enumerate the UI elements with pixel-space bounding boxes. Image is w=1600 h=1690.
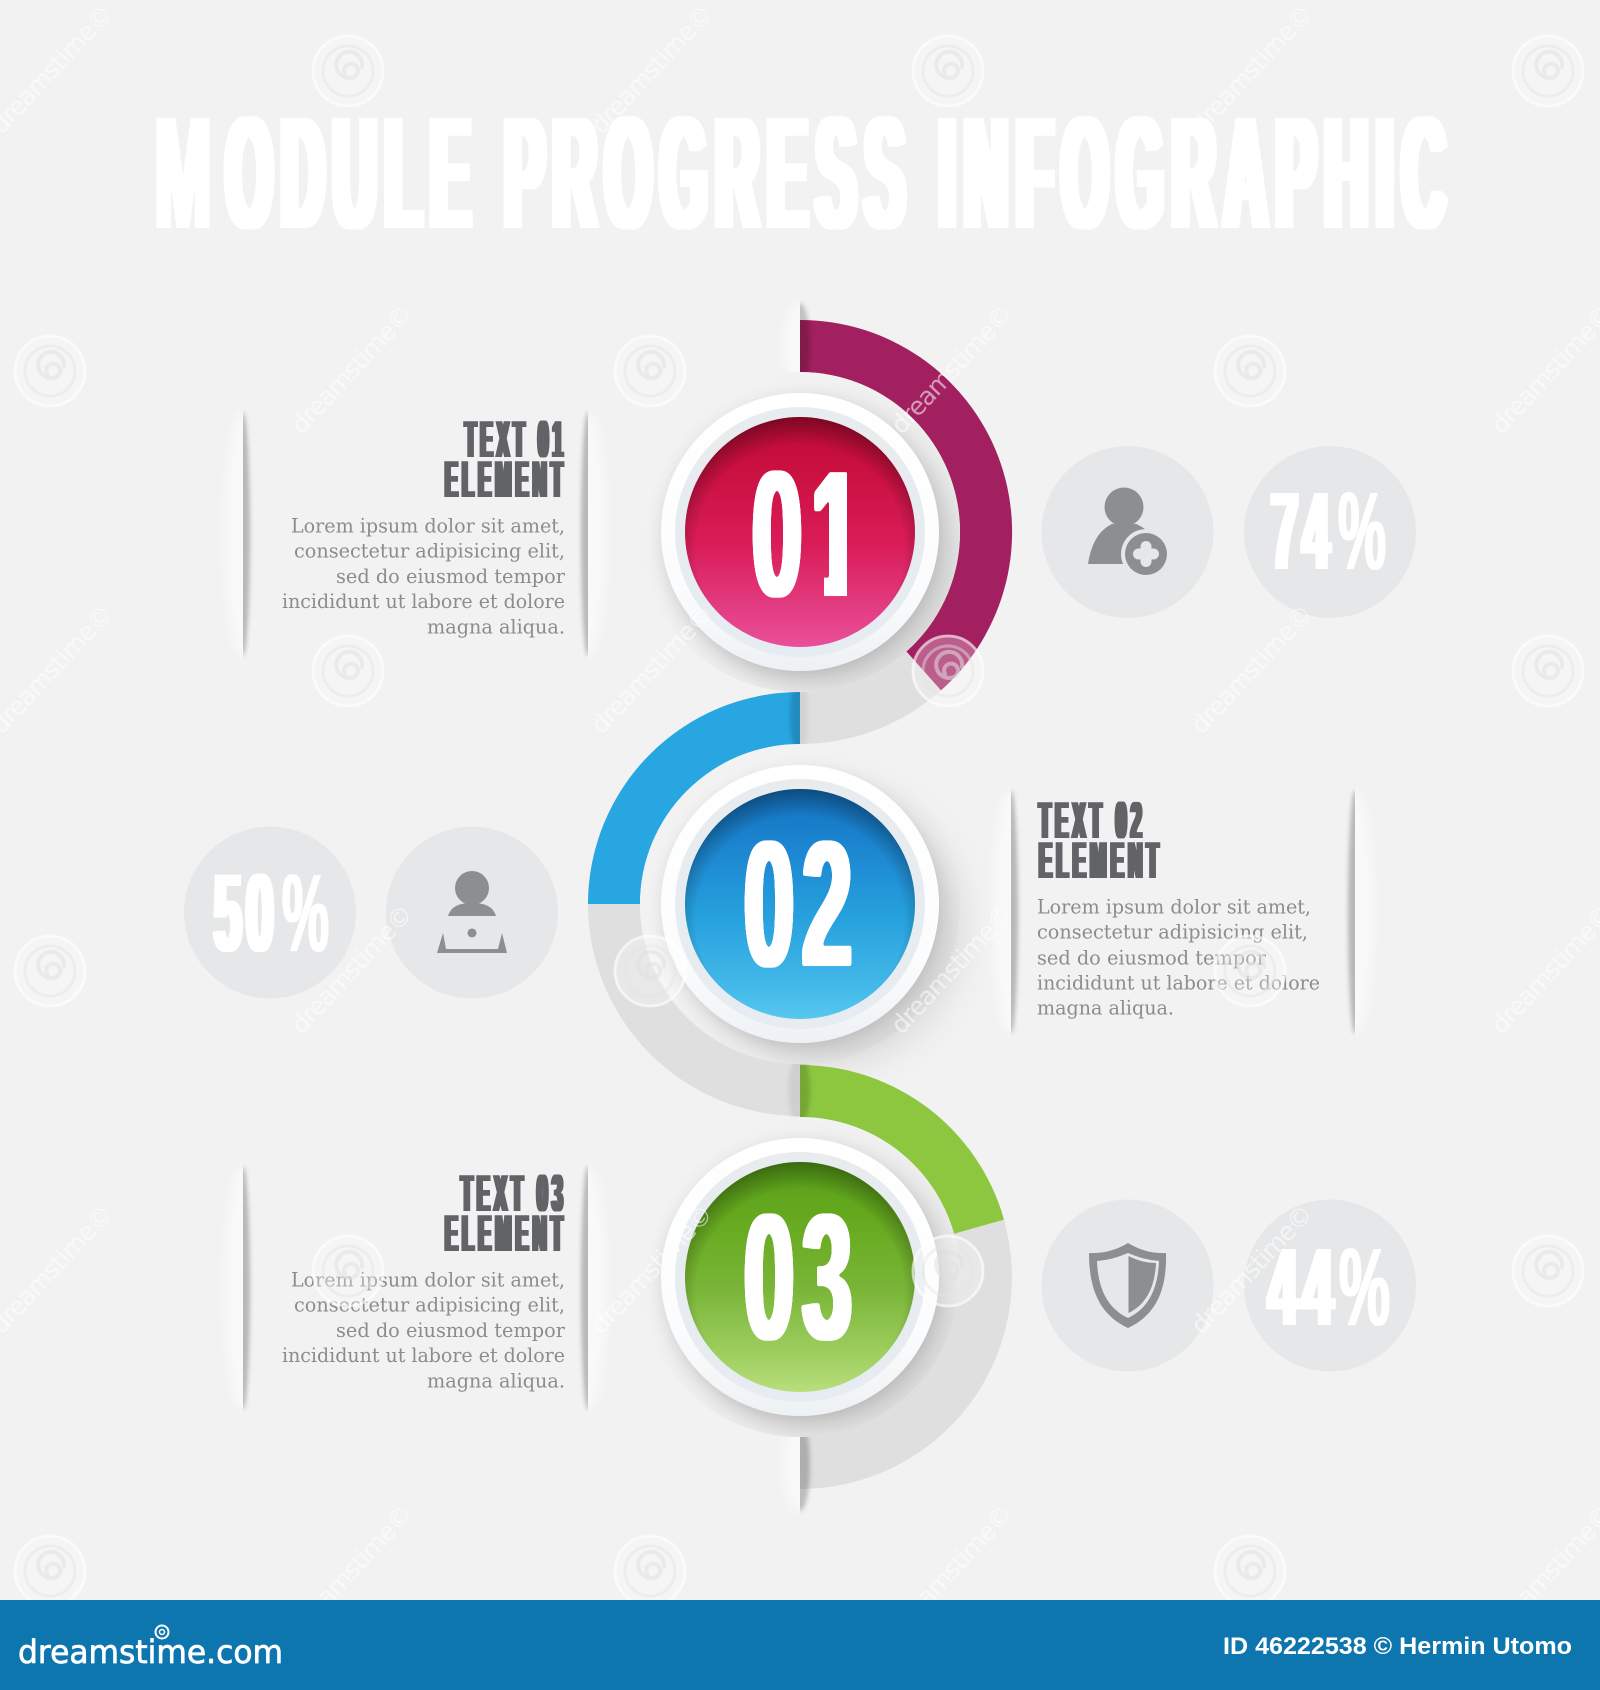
footer credit: ID 46222538 © Hermin Utomo	[1223, 1633, 1572, 1660]
text block: text 03 body: consectetur adipisicing elit,	[294, 1292, 565, 1316]
title: M	[155, 83, 211, 262]
text block: text 01 body: consectetur adipisicing elit,	[294, 538, 565, 562]
stat: 74%	[1244, 446, 1416, 618]
text block: text 01 body: magna aliqua.	[427, 614, 565, 638]
stat: 50%: %	[282, 852, 329, 975]
progress ring 1: purple arc with grey track	[800, 320, 1012, 744]
text block: text 01 body: Lorem ipsum dolor sit amet,	[291, 514, 565, 538]
text block: text 02 body	[1037, 894, 1320, 1020]
text: TEXT 01	[465, 411, 567, 469]
text block: text 03 body	[282, 1268, 565, 1392]
panel: text 01	[225, 411, 606, 656]
panel: text 02	[993, 790, 1373, 1034]
text block: text 02 body: incididunt ut labore et dolore	[1037, 970, 1320, 994]
fold shadows along the centre line	[788, 302, 812, 1512]
stat: 44%	[1244, 1200, 1416, 1372]
text block: text 02 body: consectetur adipisicing elit,	[1037, 920, 1308, 944]
text block: text 03 body: magna aliqua.	[427, 1368, 565, 1392]
stat: 50%: 50	[214, 852, 278, 975]
stat: 74%: %	[1338, 470, 1386, 593]
text block: text 01 body	[282, 514, 565, 638]
text block: text 03 body: sed do eiusmod tempor	[336, 1318, 565, 1342]
badge 01	[640, 372, 960, 692]
watermarks: dreamstime©	[885, 1499, 1019, 1639]
stat: 50%	[184, 826, 356, 998]
text block: text 02 body: sed do eiusmod tempor	[1037, 946, 1266, 970]
stat: 74%: 74	[1271, 470, 1334, 593]
text block: text 02 body: Lorem ipsum dolor sit amet,	[1037, 894, 1311, 918]
panel: text 03: TEXT 03	[461, 1165, 567, 1223]
watermarks: dreamstime©	[585, 0, 719, 139]
watermarks: dreamstime©	[585, 1199, 719, 1339]
progress ring 3: green arc with grey track	[800, 1065, 1012, 1489]
watermarks: dreamstime©	[285, 899, 419, 1039]
text block: text 02 body: magna aliqua.	[1037, 996, 1174, 1020]
panel: text 03	[225, 1165, 606, 1410]
watermarks: dreamstime©	[885, 899, 1019, 1039]
badge 02 soft shadow	[686, 790, 958, 1062]
watermarks: dreamstime©	[285, 1499, 419, 1639]
badge 03	[640, 1117, 960, 1437]
text: ELEMENT	[445, 1205, 567, 1263]
heading: text 01	[445, 411, 567, 509]
text block: text 03 body: Lorem ipsum dolor sit amet,	[291, 1268, 565, 1292]
stat: 44%: %	[1339, 1226, 1390, 1349]
footer bar	[0, 1600, 1600, 1690]
number 01: 01	[752, 434, 861, 635]
text block: text 03 body: incididunt ut labore et dolore	[282, 1343, 565, 1367]
watermarks: dreamstime©	[885, 299, 1019, 439]
watermarks: dreamstime©	[585, 599, 719, 739]
heading: text 02	[1039, 792, 1163, 890]
icon: shield	[1042, 1200, 1214, 1372]
watermarks: dreamstime©	[1185, 1199, 1319, 1339]
badge 02	[640, 744, 960, 1064]
watermarks: dreamstime©	[285, 299, 419, 439]
text block: text 01 body: sed do eiusmod tempor	[336, 564, 565, 588]
icon: person at laptop	[386, 826, 558, 998]
progress ring 2: blue arc with grey track	[588, 692, 800, 1116]
text: ELEMENT	[445, 451, 567, 509]
icon: person add	[1042, 446, 1214, 618]
panel: text 02: TEXT 02	[1039, 792, 1146, 850]
watermarks: dreamstime©	[1185, 0, 1319, 139]
footer logo: dreamstime.com	[18, 1633, 283, 1671]
panel: text 02: ELEMENT	[1039, 832, 1163, 890]
text block: text 01 body: incididunt ut labore et dolore	[282, 589, 565, 613]
heading: text 03	[445, 1165, 567, 1263]
stat: 44%: 44	[1268, 1226, 1338, 1349]
number 02: 02	[744, 804, 852, 1005]
watermarks: dreamstime©	[1185, 599, 1319, 739]
number 03: 03	[744, 1177, 852, 1378]
